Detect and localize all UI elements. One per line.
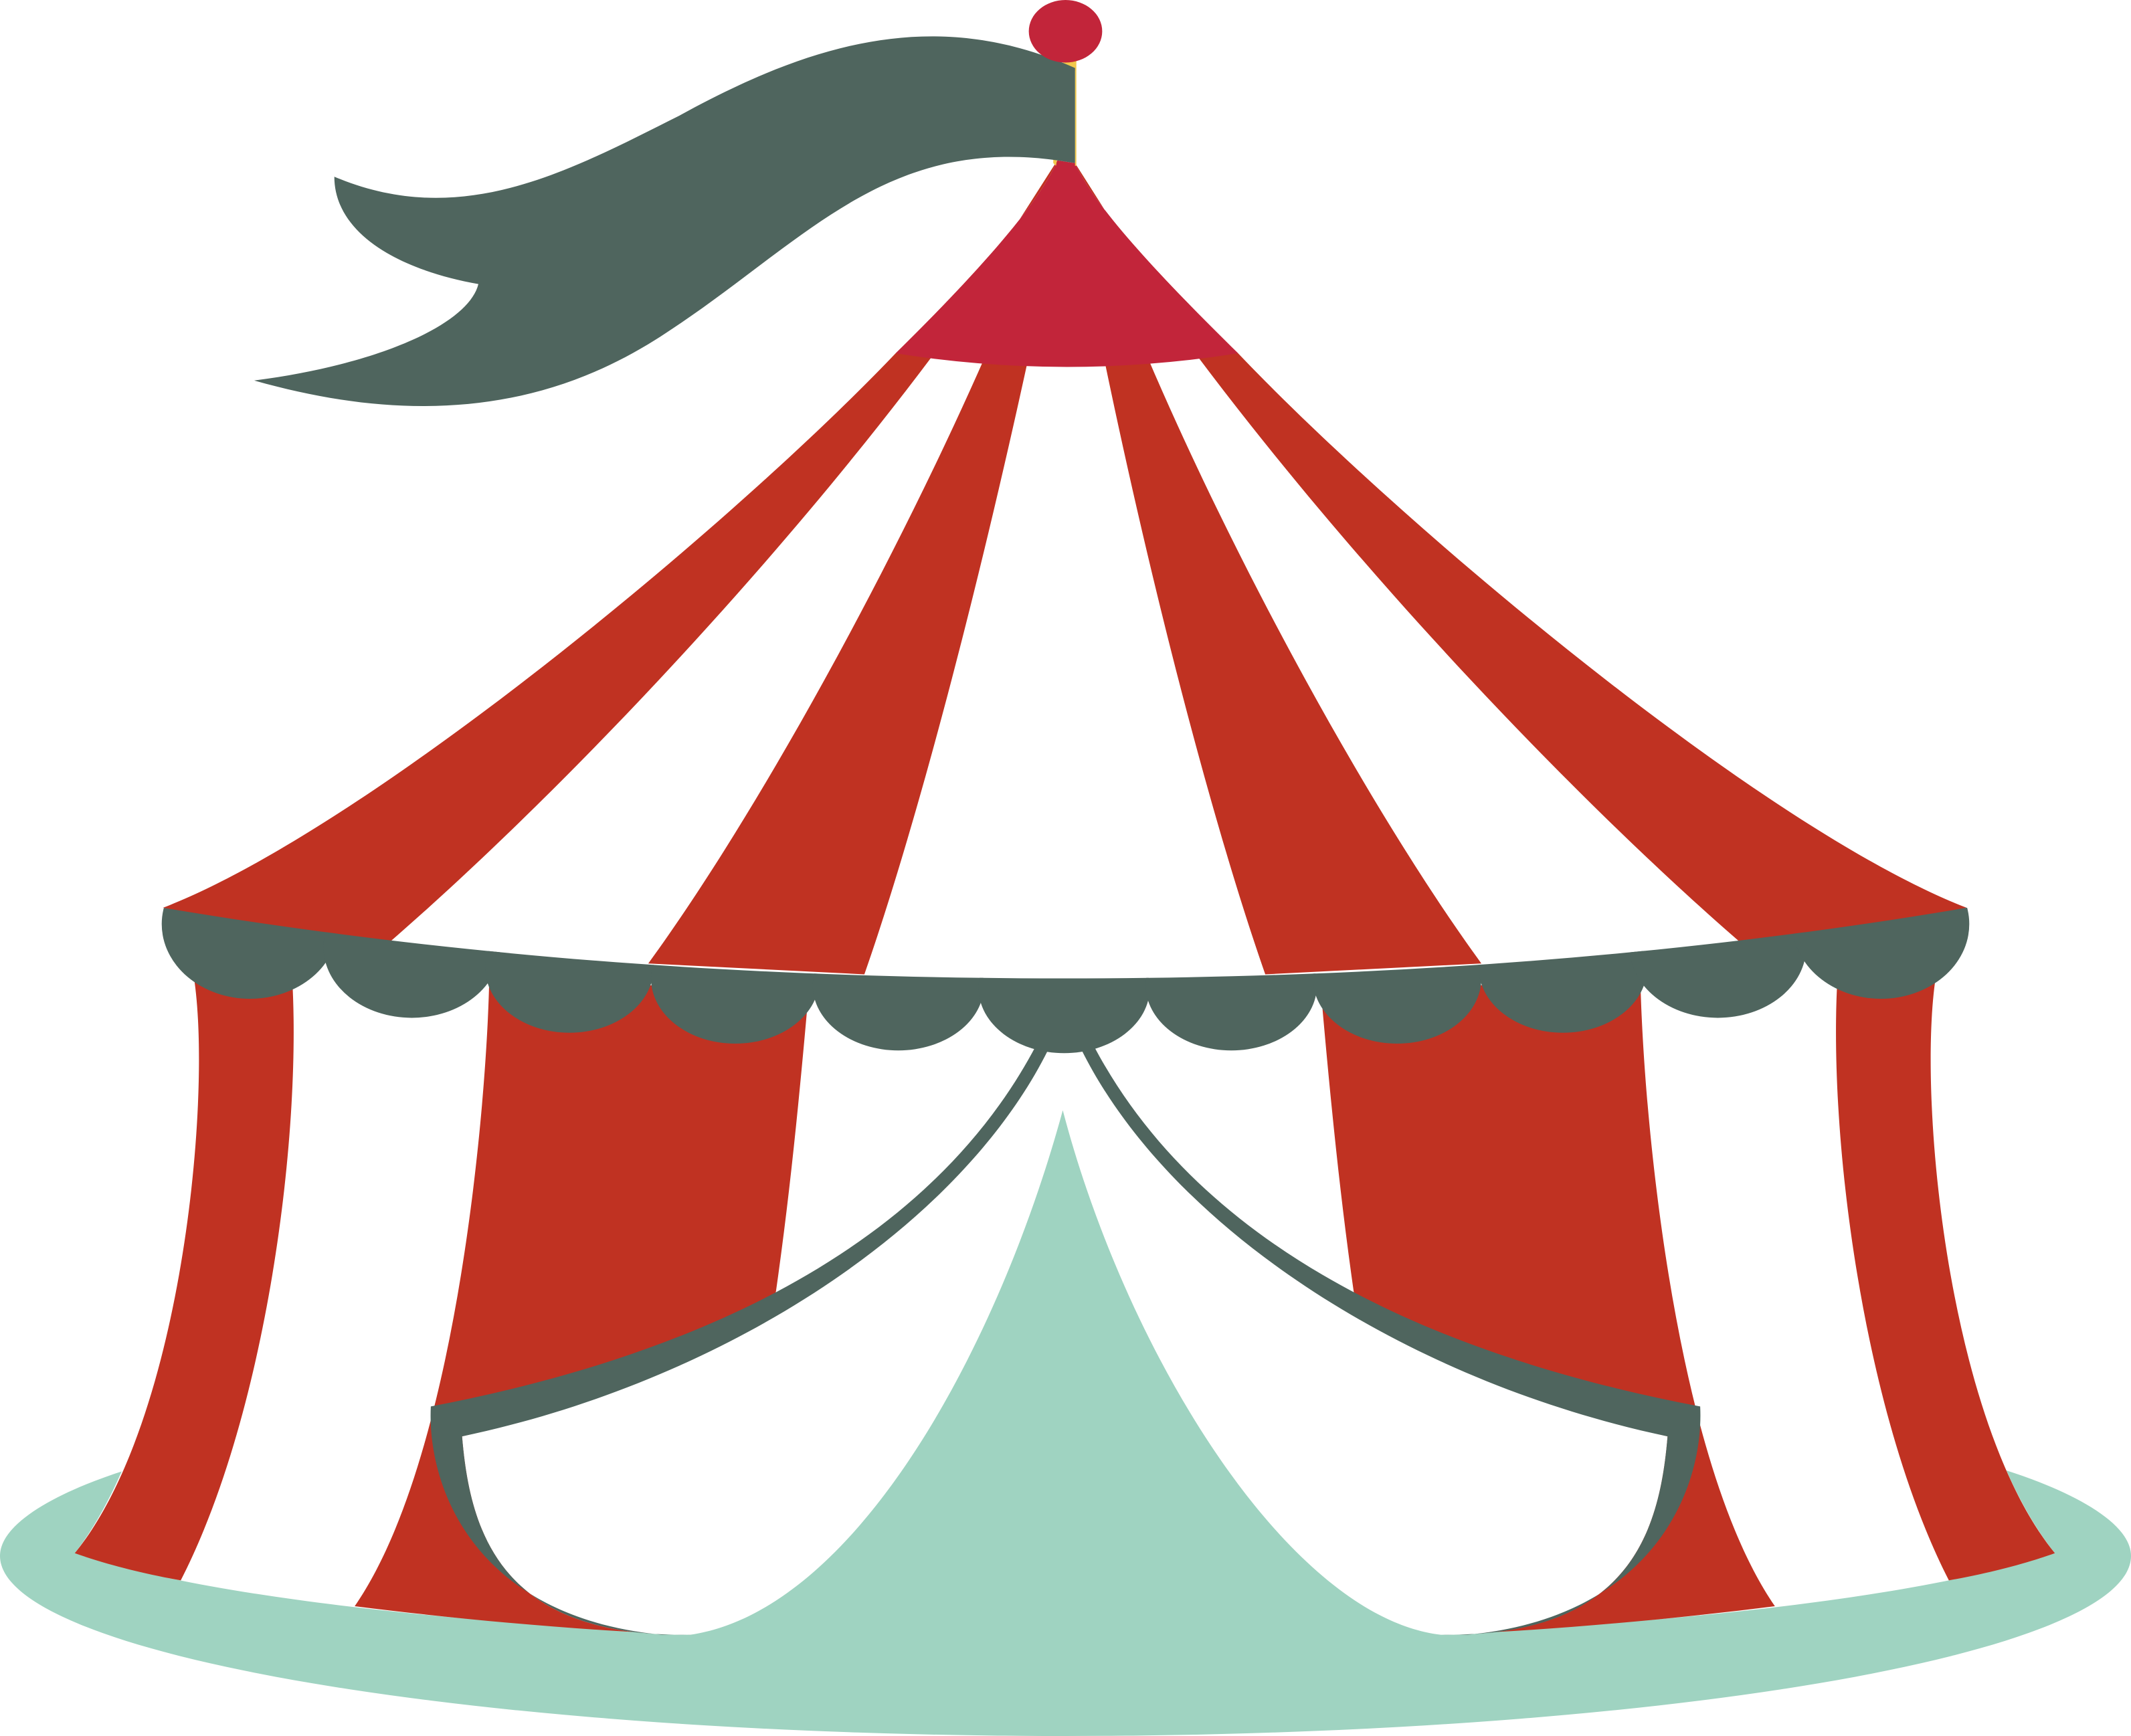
left outer wall stripe [75,971,294,1580]
left inner wall stripe [355,979,809,1635]
ground ellipse [0,1470,2131,1736]
roof outer stripe right [1075,163,1966,942]
roof inner stripe left [648,356,1029,974]
scalloped valance [162,907,1970,1053]
right wall stripes [1321,971,2055,1635]
entrance opening [690,1111,1441,1685]
flag [254,36,1075,406]
roof inner stripe right [1103,356,1481,974]
left curtain swag [431,1046,1048,1635]
roof outer stripe left [163,161,1057,942]
yellow pole sliver [1053,60,1077,166]
top ball [1029,0,1102,62]
entrance white curtains [462,1046,1667,1635]
roof cap [896,161,1238,367]
right outer wall stripe [1836,971,2055,1580]
left wall stripes [75,971,809,1635]
tent white body [75,951,2055,1635]
right curtain swag [1082,1046,1700,1635]
right inner wall stripe [1321,979,1775,1635]
